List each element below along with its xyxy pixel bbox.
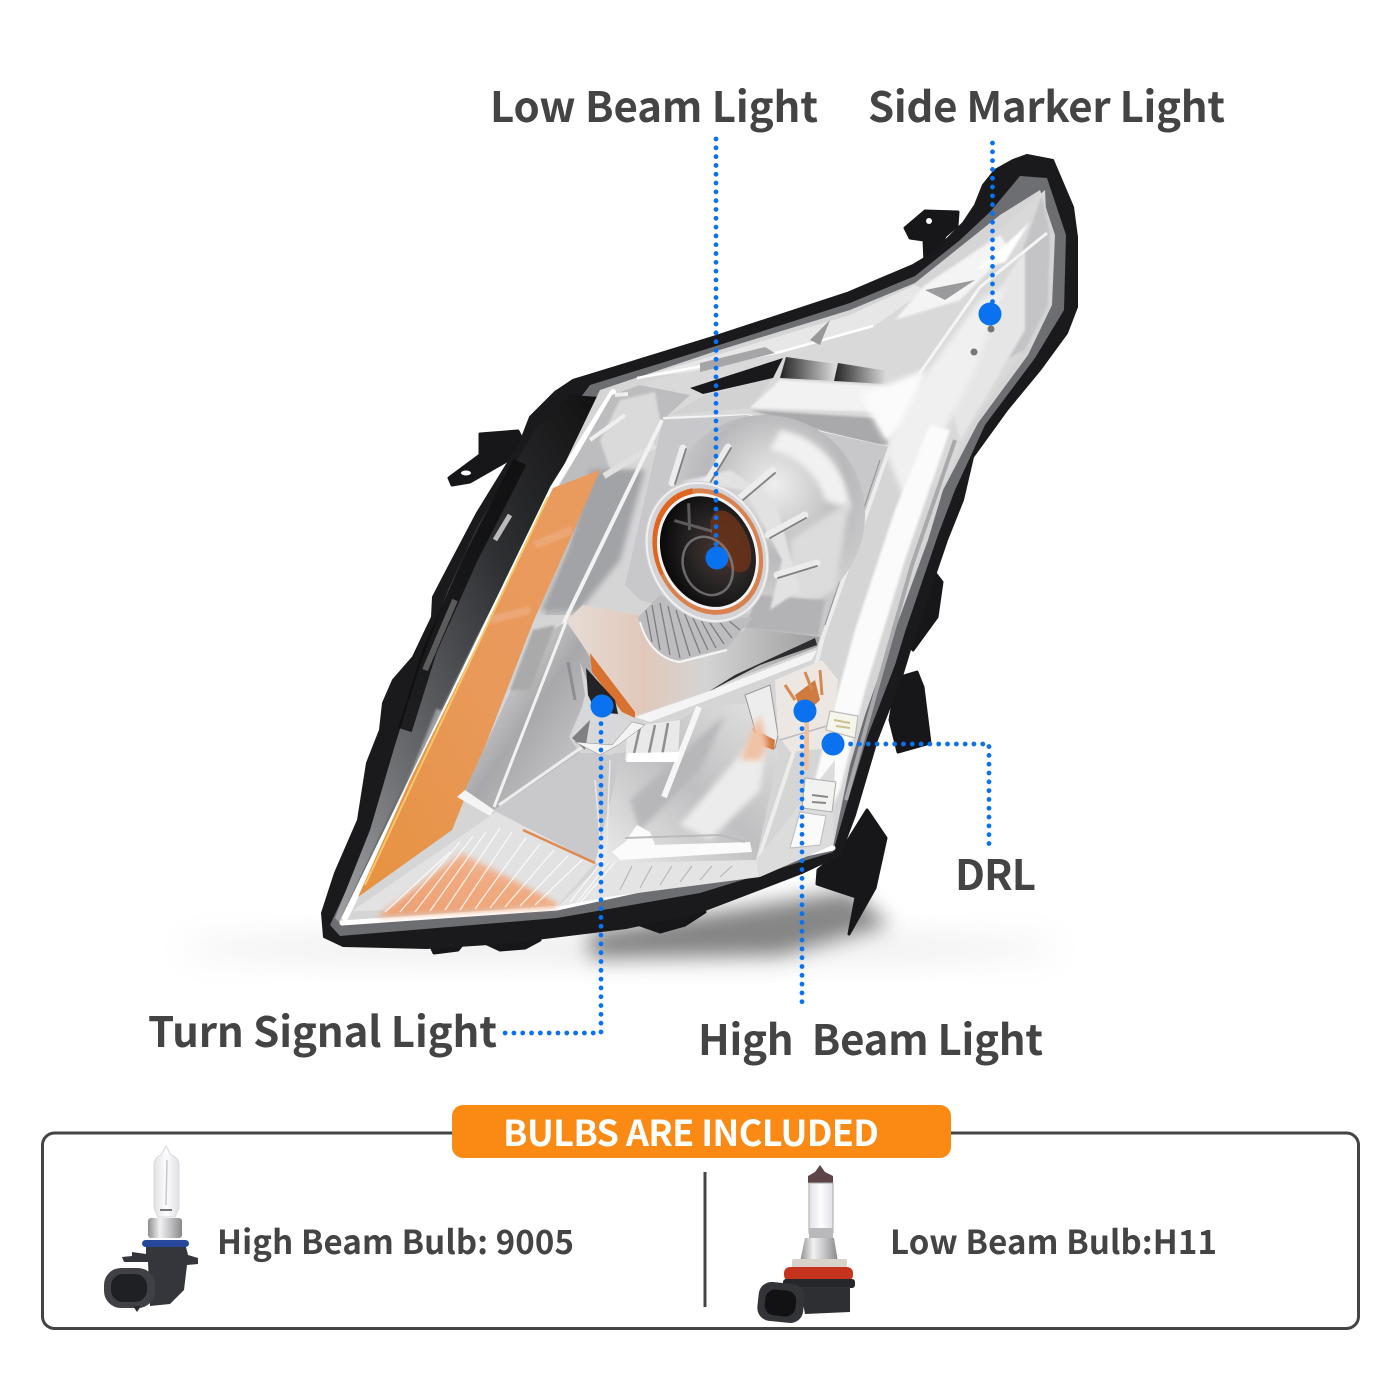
top reflector area <box>640 190 1050 490</box>
badge: bulbs are included: BULBS ARE INCLUDED <box>503 1105 879 1157</box>
label: high beam bulb: High Beam Bulb: 9005 <box>217 1216 574 1264</box>
DRL LED modules <box>790 711 858 848</box>
panel: bulbs included <box>42 1105 1358 1328</box>
white DRL light strip <box>756 425 955 866</box>
leader line: low beam <box>714 139 718 558</box>
headlight assembly <box>180 155 1077 960</box>
marker: low beam <box>706 546 728 570</box>
grey glass rim <box>330 176 1066 936</box>
marker: DRL <box>822 732 844 756</box>
upper right clear panel <box>885 195 1050 500</box>
callout: low beam light <box>490 74 818 570</box>
callout: low beam light: Low Beam Light <box>490 74 818 135</box>
callout: DRL <box>822 732 1036 903</box>
callout: side marker light: Side Marker Light <box>868 74 1225 135</box>
callout: turn signal light: Turn Signal Light <box>148 999 497 1060</box>
callout: side marker light <box>868 74 1225 326</box>
leader line: turn signal <box>500 706 601 1033</box>
icon: 9005 high beam bulb <box>104 1146 198 1312</box>
silver plate <box>567 605 820 722</box>
left clear section <box>335 395 600 922</box>
white rim strips <box>342 392 833 923</box>
turn signal bulb socket <box>568 662 645 755</box>
callout: turn signal light <box>148 694 614 1060</box>
projector lens <box>622 461 792 643</box>
projector fins <box>672 447 817 578</box>
callout: high beam light: High Beam Light <box>698 1007 1043 1068</box>
panel border <box>42 1133 1358 1328</box>
projector collar <box>638 595 753 662</box>
marker: turn signal <box>590 694 614 718</box>
amber turn signal lens <box>358 470 600 897</box>
black housing <box>322 155 1077 948</box>
leader line: side marker <box>990 143 995 314</box>
reflector panel behind projector <box>625 415 890 637</box>
callout: DRL: DRL <box>955 842 1036 903</box>
main interior rail <box>494 420 662 807</box>
callout: high beam light <box>698 700 1043 1068</box>
label: low beam bulb: Low Beam Bulb:H11 <box>890 1216 1217 1264</box>
clear lens interior <box>339 190 1055 922</box>
projector dome <box>665 415 865 636</box>
marker: high beam <box>794 700 816 722</box>
mounting brackets <box>429 211 958 953</box>
marker: side marker <box>978 302 1002 326</box>
lower centre reflector <box>595 703 779 863</box>
leader line: high beam <box>800 711 804 1005</box>
lower left reflector <box>457 622 622 863</box>
divider <box>704 1172 706 1307</box>
bracket bolt holes <box>461 218 932 476</box>
ground shadow <box>180 890 1060 960</box>
projector spider base <box>680 470 800 610</box>
top clear strip <box>637 222 1030 378</box>
lower clear trim with hatching <box>352 760 835 917</box>
upper left reflector <box>540 385 690 615</box>
leader line: DRL <box>833 744 989 845</box>
high beam socket <box>740 685 778 760</box>
icon: H11 low beam bulb <box>756 1165 855 1324</box>
orange lattice reflector <box>775 660 838 770</box>
